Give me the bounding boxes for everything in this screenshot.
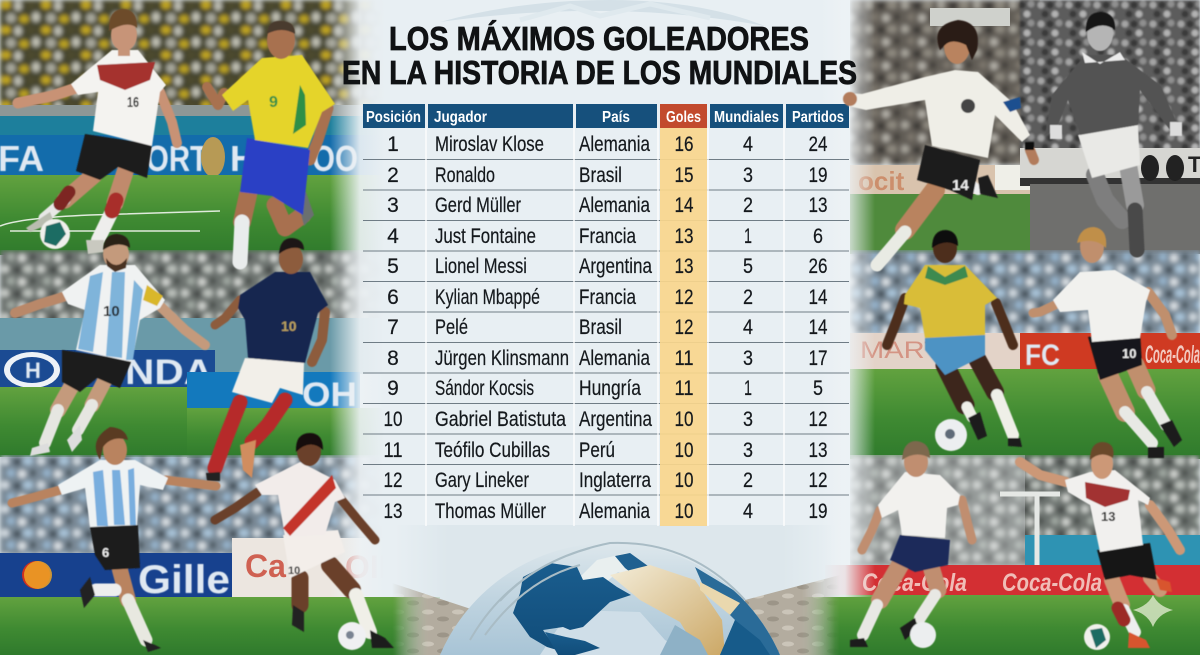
left background: stadium scenes: Gille — [138, 558, 230, 602]
right background: stadium scenes: ocit — [858, 166, 905, 196]
row 7: 12 — [674, 316, 694, 339]
row 8: Jürgen Klinsmann — [435, 347, 569, 370]
right background: stadium scenes: FC — [1025, 339, 1060, 372]
row 7: Pelé — [435, 316, 468, 339]
row 8: 3 — [743, 347, 753, 370]
table header — [363, 104, 849, 128]
row 2: 3 — [743, 164, 753, 187]
row 6: Francia — [579, 286, 636, 309]
row 11: 13 — [808, 439, 828, 462]
row 11: Teófilo Cubillas — [435, 439, 550, 462]
player: Lionel Messi: 10 — [103, 303, 120, 320]
table header: Mundiales — [714, 109, 779, 126]
row 1: 1 — [387, 133, 399, 156]
watermark: four-point star — [1133, 595, 1173, 627]
row 10: 10 — [384, 408, 402, 431]
row 5 — [387, 255, 828, 278]
player: Gary Lineker — [850, 441, 972, 648]
row 9: Sándor Kocsis — [435, 377, 534, 400]
player: Kylian Mbappé: 10 — [281, 318, 297, 334]
player: Ronaldo — [207, 21, 335, 262]
stadium stands right — [745, 575, 840, 655]
row 12: Inglaterra — [579, 469, 651, 492]
row 9: 11 — [674, 377, 694, 400]
row 10: 12 — [808, 408, 828, 431]
row 2: Ronaldo — [435, 164, 495, 187]
row 9: 5 — [813, 377, 823, 400]
row 1: 16 — [674, 133, 694, 156]
row 11 — [384, 439, 828, 462]
row 5: Argentina — [579, 255, 652, 278]
row 7 — [387, 316, 828, 339]
player: Kylian Mbappé — [206, 238, 328, 481]
row 12: 2 — [743, 469, 753, 492]
row 8: Alemania — [579, 347, 650, 370]
player: Gerd Müller: 14 — [952, 177, 969, 194]
row 10: Gabriel Batistuta — [435, 408, 566, 431]
row 9: 9 — [387, 377, 399, 400]
row 4: 4 — [387, 225, 399, 248]
row 7: 4 — [743, 316, 753, 339]
row 10: 3 — [743, 408, 753, 431]
row 7: 7 — [387, 316, 399, 339]
row 4: 13 — [674, 225, 694, 248]
row 13: Alemania — [579, 500, 650, 523]
row 10: Argentina — [579, 408, 652, 431]
row 7: 14 — [808, 316, 828, 339]
row 4: Francia — [579, 225, 636, 248]
row 3: 3 — [387, 194, 399, 217]
row 12: 12 — [808, 469, 828, 492]
row 12: 10 — [674, 469, 694, 492]
row 5: 26 — [808, 255, 828, 278]
right background: stadium scenes — [790, 0, 1200, 655]
player: Miroslav Klose: 16 — [127, 94, 139, 111]
row 2: 2 — [387, 164, 399, 187]
player: Miroslav Klose — [18, 9, 177, 254]
right background: stadium scenes: Coca-Cola — [862, 569, 967, 597]
row 4: Just Fontaine — [435, 225, 536, 248]
row 6: 14 — [808, 286, 828, 309]
row 2 — [387, 164, 828, 187]
left background: stadium scenes: NDA — [125, 353, 213, 392]
row 10: 10 — [674, 408, 694, 431]
row 9 — [387, 377, 823, 400]
globe — [440, 543, 785, 655]
left background: stadium scenes: OO — [312, 138, 358, 179]
row 8: 11 — [674, 347, 694, 370]
row 13: Thomas Müller — [435, 500, 546, 523]
row 5: 5 — [743, 255, 753, 278]
row 4: 6 — [813, 225, 823, 248]
title: LOS MÁXIMOS GOLEADORES — [389, 20, 809, 57]
player: Lionel Messi — [15, 234, 205, 456]
table header: Posición — [366, 109, 421, 126]
row 3: 13 — [808, 194, 828, 217]
left background: stadium scenes — [0, 0, 440, 655]
left background: stadium scenes: H — [25, 358, 41, 383]
stadium stands left — [394, 584, 469, 655]
row 9: Hungría — [579, 377, 641, 400]
table header: País — [602, 109, 630, 126]
player: Teófilo Cubillas: 10 — [288, 565, 300, 577]
row 10 — [384, 408, 828, 431]
row 3: 14 — [674, 194, 694, 217]
row 13: 4 — [743, 500, 753, 523]
row 12: Gary Lineker — [435, 469, 529, 492]
row 5: Lionel Messi — [435, 255, 527, 278]
row 12: 12 — [384, 469, 402, 492]
player: Jürgen Klinsmann — [1033, 227, 1182, 458]
player: Gerd Müller — [843, 20, 1034, 265]
row 3: Gerd Müller — [435, 194, 521, 217]
left background: stadium scenes: OH — [302, 376, 357, 414]
row 13: 19 — [808, 500, 828, 523]
left background: stadium scenes: OII — [345, 549, 388, 585]
bottom scene: stadium and globe — [392, 525, 840, 655]
title — [342, 20, 857, 91]
player: Just Fontaine — [1045, 12, 1182, 250]
left background: stadium scenes: ORT — [146, 138, 208, 179]
table header: Partidos — [792, 109, 844, 126]
row 4: 1 — [744, 225, 752, 248]
row 8: 17 — [808, 347, 828, 370]
center panel background — [330, 0, 875, 597]
right background: stadium scenes: MARTI — [860, 337, 950, 364]
player: Ronaldo: 9 — [269, 94, 278, 111]
row 4 — [387, 225, 823, 248]
row 13: 13 — [384, 500, 402, 523]
table of top scorers — [363, 104, 849, 526]
row 6 — [387, 286, 828, 309]
continent: North America — [513, 563, 631, 650]
row 11: 10 — [674, 439, 694, 462]
row 1: Miroslav Klose — [435, 133, 544, 156]
row 3: Alemania — [579, 194, 650, 217]
row 3 — [387, 194, 828, 217]
continent: Greenland — [581, 553, 628, 580]
row 1: 24 — [808, 133, 828, 156]
player: Gabriel Batistuta: 6 — [102, 545, 109, 560]
title: EN LA HISTORIA DE LOS MUNDIALES — [342, 54, 857, 91]
row 6: 6 — [387, 286, 399, 309]
row 2: Brasil — [579, 164, 622, 187]
row 11: Perú — [579, 439, 615, 462]
row 6: Kylian Mbappé — [435, 286, 540, 309]
row 13 — [384, 500, 828, 523]
player: Gabriel Batistuta — [12, 427, 216, 652]
table header: Jugador — [434, 109, 487, 126]
row 1 — [387, 133, 828, 156]
right background: stadium scenes: Coca-Cola — [1002, 569, 1102, 597]
row 12 — [384, 469, 828, 492]
row 2: 15 — [674, 164, 694, 187]
faint globe behind the title — [440, 0, 765, 26]
row 13: 10 — [674, 500, 694, 523]
left background: stadium scenes: Ca — [245, 548, 286, 584]
row 2: 19 — [808, 164, 828, 187]
row 5: 13 — [674, 255, 694, 278]
row 11: 11 — [384, 439, 402, 462]
player: Thomas Müller: 13 — [1101, 509, 1115, 524]
row 5: 5 — [387, 255, 399, 278]
row 8 — [387, 347, 828, 370]
row 6: 2 — [743, 286, 753, 309]
row 7: Brasil — [579, 316, 622, 339]
row 1: Alemania — [579, 133, 650, 156]
row 9: 1 — [744, 377, 752, 400]
player: Jürgen Klinsmann: 10 — [1122, 346, 1136, 361]
row 8: 8 — [387, 347, 399, 370]
row 6: 12 — [674, 286, 694, 309]
table header: Goles — [666, 109, 701, 126]
continent: Europe and Africa — [610, 565, 725, 655]
left background: stadium scenes: H — [230, 138, 256, 179]
player: Thomas Müller — [1020, 442, 1180, 650]
row 3: 2 — [743, 194, 753, 217]
row 11: 3 — [743, 439, 753, 462]
row 1: 4 — [743, 133, 753, 156]
player: Teófilo Cubillas — [215, 433, 394, 650]
bottom sky band — [395, 525, 835, 655]
player: Pelé — [887, 230, 1022, 451]
